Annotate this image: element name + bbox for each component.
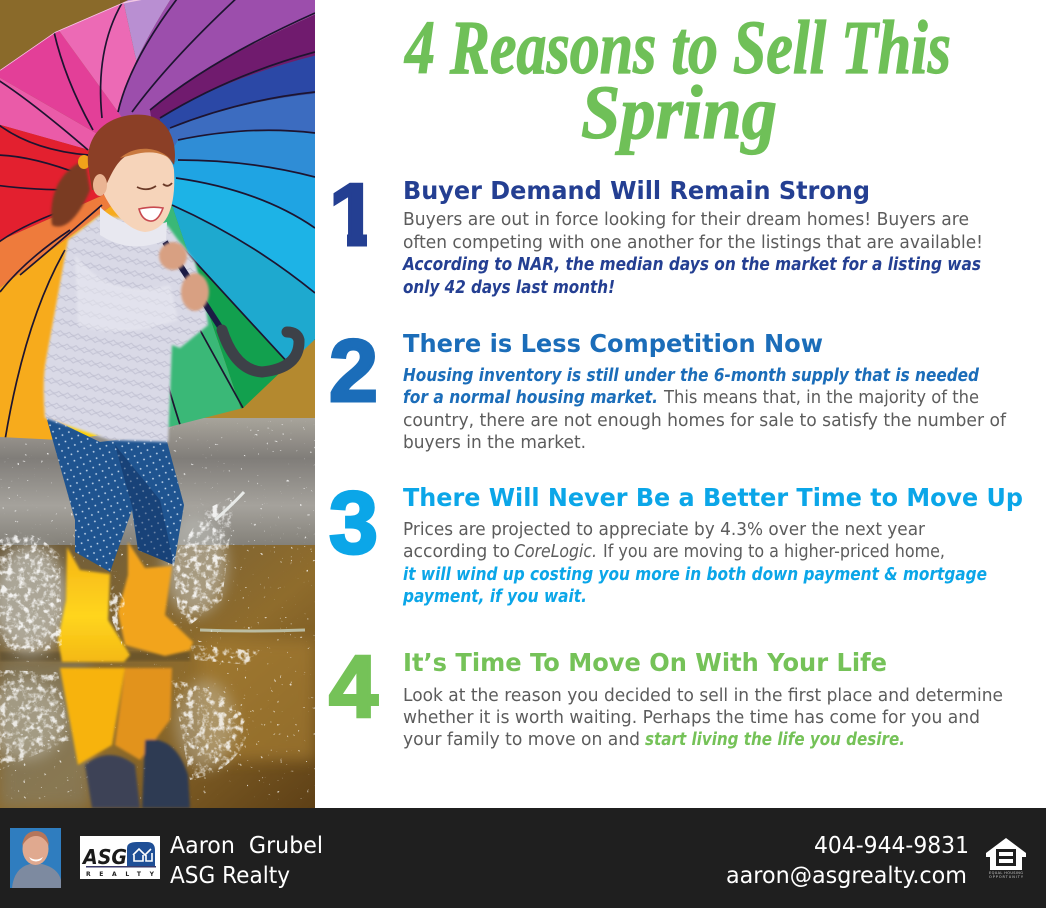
body 1: Buyers are out in force looking for their dream homes! Buyers are — [403, 210, 969, 230]
body 3: according to — [403, 542, 510, 562]
body 2: Housing inventory is still under the 6-month supply that is needed — [403, 366, 979, 386]
numeral 3: 3 — [329, 473, 378, 572]
ASG Realty logo: REALTY — [86, 871, 155, 878]
body 1: According to NAR, the median days on the market for a listing was — [401, 255, 981, 275]
body 3: payment, if you wait. — [402, 587, 587, 607]
reason 1 — [334, 180, 980, 296]
girl — [44, 115, 299, 662]
heading 3: There Will Never Be a Better Time to Move Up — [403, 483, 1023, 512]
body 1: only 42 days last month! — [403, 278, 615, 298]
numeral 4: 4 — [329, 637, 378, 736]
icon: equal housing opportunity: OPPORTUNITY — [989, 875, 1024, 879]
body 3: If you are moving to a higher-priced home, — [603, 542, 945, 562]
title: Spring — [581, 71, 777, 155]
body 2: This means that, in the majority of the — [663, 388, 979, 408]
hands — [159, 242, 209, 311]
contact details: aaron@asgrealty.com — [726, 863, 967, 889]
footer bar — [0, 808, 1046, 908]
ASG Realty logo — [80, 836, 160, 879]
body 2: country, there are not enough homes for sale to satisfy the number of — [403, 411, 1007, 431]
jeans — [46, 416, 184, 572]
rainbow umbrella — [0, 0, 330, 445]
ASG Realty logo: ASG — [81, 845, 127, 869]
reason 3 — [329, 473, 1023, 607]
umbrella handle — [165, 242, 299, 372]
ponytail — [51, 160, 90, 227]
body 2: buyers in the market. — [403, 433, 586, 453]
agent name and company — [170, 833, 323, 889]
reflection in puddle — [60, 668, 190, 808]
heading 2: There is Less Competition Now — [403, 329, 823, 358]
body 3 — [402, 520, 987, 607]
body 1: often competing with one another for the listings that are available! — [403, 233, 983, 253]
icon: equal housing opportunity — [986, 838, 1026, 879]
body 3: CoreLogic. — [514, 542, 597, 562]
heading 1: Buyer Demand Will Remain Strong — [403, 176, 870, 205]
water splash — [0, 492, 305, 780]
agent name and company: ASG Realty — [170, 863, 290, 889]
body 4: start living the life you desire. — [645, 730, 905, 750]
body 4: Look at the reason you decided to sell in the first place and determine — [403, 686, 1003, 706]
contact details: 404-944-9831 — [814, 833, 969, 859]
agent name and company: Aaron Grubel — [170, 833, 323, 859]
boots — [58, 542, 193, 662]
reason 4 — [329, 637, 1003, 750]
hair — [88, 115, 175, 190]
sweater — [44, 207, 208, 442]
body 2 — [403, 366, 1007, 453]
face — [102, 150, 174, 232]
photo: girl with rainbow umbrella — [0, 0, 330, 808]
umbrella ribs — [0, 0, 315, 440]
body 4: whether it is worth waiting. Perhaps the time has come for you and — [403, 708, 980, 728]
title — [403, 6, 951, 155]
body 2: for a normal housing market. — [403, 388, 658, 408]
facial features — [93, 174, 172, 221]
body 4: your family to move on and — [403, 730, 640, 750]
body 1 — [401, 210, 983, 298]
contact details — [726, 833, 969, 889]
body 4 — [403, 686, 1003, 750]
photo backdrop — [0, 0, 315, 808]
icon: equal housing opportunity: EQUAL HOUSING — [989, 871, 1023, 875]
numeral 2: 2 — [329, 321, 378, 420]
reason 2 — [329, 321, 1007, 453]
agent headshot — [10, 828, 61, 888]
heading 4: It’s Time To Move On With Your Life — [403, 648, 887, 677]
body 3: Prices are projected to appreciate by 4.3% over the next year — [403, 520, 926, 540]
numeral 1: 1 — [329, 165, 378, 264]
